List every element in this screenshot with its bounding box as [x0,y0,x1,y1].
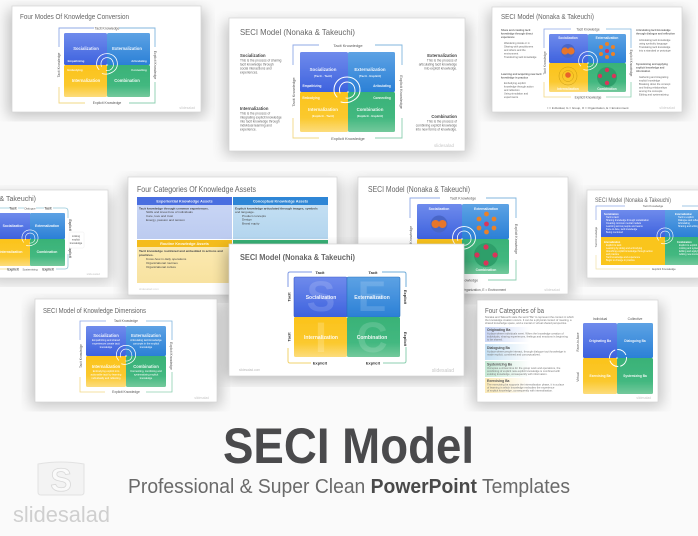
slide: SECI Model of Knowledge Dimensions: slidesalad [194,396,209,400]
slide: SECI Model of Knowledge Dimensions: Empathizing and shared [92,338,121,342]
slide: SECI Model with circles and columns: Articulating tacit knowledge [639,38,671,42]
slide: SECI Model of Knowledge Dimensions: systematizing explicit [134,372,158,376]
slide: left cropped SECI model with center box: knowledge [70,241,83,245]
slide: left cropped SECI model with center box: Internalization [0,250,22,254]
slide: SECI Model with descriptions: combining explicit knowledge [416,124,457,128]
slide: Four Categories of ba [473,300,662,406]
slide: left cropped SECI model with center box [0,190,112,282]
slide: center SECI Model with big letters: Tacit [315,270,325,275]
slide: Four Categories of ba: Originating Ba [487,328,510,332]
slide: SECI Model of Knowledge Dimensions: Internalization [92,364,121,369]
slide: right cropped SECI model with bullet lists: Creating common mental models [606,222,642,225]
slide: Four Categories Of Knowledge Assets: Explicit knowledge articulated through images, symbols [235,206,318,210]
slide: center SECI Model with big letters: Explicit [403,332,408,347]
slide: left cropped SECI model with center box: Explicit [42,268,55,272]
slide: SECI Model with circles: I = Individual, G = Group, O = Organization, E = Environment [420,288,506,292]
slide: SECI Model of Knowledge Dimensions: Articulating tacit knowledge [130,338,162,342]
slide: SECI Model with descriptions: Externalization [354,67,386,72]
slide: SECI Model with circles and columns: Tacit Knowledge [576,28,600,32]
slide: right cropped SECI model with bullet lists: Begin to change in practice [606,259,636,262]
slide: SECI Model of Knowledge Dimensions [31,299,221,406]
slide: Four Categories Of Knowledge Assets: Conceptual Knowledge Assets [253,200,308,204]
slide: SECI Model with circles: Tacit Knowledge [409,226,413,252]
slide: SECI Model with circles and columns: slidesalad [659,106,675,110]
slide: Four Modes Of Knowledge Conversion: Four Modes Of Knowledge Conversion [20,12,129,21]
slide: Four Categories Of Knowledge Assets: Organizational routines [146,261,178,265]
slide: Four Categories of ba: shared knowledge space, and a mental or virtual shared perspective. [485,321,567,325]
slide: SECI Model of Knowledge Dimensions: knowledge [140,345,153,349]
slide: SECI Model with circles and columns: Gathering and integrating [639,75,669,79]
slide: SECI Model with circles and columns: Combination [597,87,617,91]
slide: SECI Model with descriptions: Internalization [240,106,269,111]
slide: SECI Model with circles and columns: information [636,69,651,73]
slide: center SECI Model with big letters [225,244,468,380]
slide: SECI Model with circles and columns: knowledge through action [504,84,534,88]
slide: SECI Model with descriptions: Internalization [308,107,338,112]
slide: SECI Model with descriptions: (Explicit - Tacit) [312,114,334,118]
slide: SECI Model with circles: SECI Model (Nonaka & Takeuchi) [368,185,470,194]
slide: SECI Model with descriptions: slidesalad [434,143,454,148]
slide: SECI Model with circles and columns: Systemizing and applying [636,62,668,66]
slide: center SECI Model with big letters: Explicit [366,360,381,366]
slide: Four Modes Of Knowledge Conversion: Empathizing [68,59,85,63]
slide: Four Modes Of Knowledge Conversion: Socialization [73,46,99,51]
slide: Four Categories of ba: of explicit knowledge, consequently with internalization. [487,388,553,392]
slide: SECI Model with descriptions: (Tacit - Tacit) [314,74,332,78]
slide: right cropped SECI model with bullet lists: Tacit Knowledge [643,204,664,208]
slide: SECI Model of Knowledge Dimensions: Tacit Knowledge [114,319,138,323]
slide: left cropped SECI model with center box: Tacit [44,206,53,210]
slide: right cropped SECI model with bullet lists: Tacit to explicit [678,216,694,219]
slide: center SECI Model with big letters: Explicit [313,360,328,366]
slide: right cropped SECI model with bullet lists: Tacit Knowledge [594,226,598,247]
slide: SECI Model of Knowledge Dimensions: Embodying explicit into [93,369,120,373]
slide: SECI Model with descriptions: into explicit knowledge. [424,66,457,70]
slide: left cropped SECI model with center box: Linking [72,234,81,238]
slide: SECI Model with circles [354,177,572,298]
slide: SECI Model with descriptions: Combination [431,114,457,119]
slide: Four Modes Of Knowledge Conversion: Embodying [67,68,83,72]
slide: Four Categories Of Knowledge Assets: Design [242,218,252,222]
slide: Four Categories of ba: Systemizing Ba [623,374,647,378]
slide: SECI Model with circles and columns: knowledge through direct [501,32,533,36]
slide: SECI Model with circles and columns: Articulating tacit knowledge [636,28,671,32]
slide: right cropped SECI model with bullet lists: Learning across people and teams [606,225,643,228]
slide: right cropped SECI model with bullet lists: Learning by doing and embodying [606,247,643,250]
slide: right cropped SECI model with bullet lists: Explicit to explicit [679,244,698,247]
slide: Four Categories Of Knowledge Assets [124,177,341,297]
slide: SECI Model with circles and columns: Sharing with practitioners [504,44,534,48]
slide: right cropped SECI model with bullet lists: Face-to-face, tacit knowledge [606,228,638,231]
slide: SECI Model with circles and columns: Embodying explicit [504,81,526,85]
slide: Four Modes Of Knowledge Conversion: Explicit Knowledge [153,51,157,79]
slide: SECI Model with descriptions [225,18,469,155]
slide: left cropped SECI model with center box: Explicit [68,219,72,232]
slide: SECI Model with descriptions: Embodying [302,96,320,100]
slide: right cropped SECI model with bullet lists: Explicit to tacit [606,244,622,247]
slide: Four Categories of ba: made explicit, combined and conceptualized. [487,352,541,356]
slide: left cropped SECI model with center box: Combination [37,250,57,254]
slide: Four Categories Of Knowledge Assets: Brand equity [242,222,260,226]
slide: SECI Model of Knowledge Dimensions: SECI Model of Knowledge Dimensions [43,306,146,315]
slide: SECI Model of Knowledge Dimensions: Combination [133,364,159,369]
slide: center SECI Model with big letters: C [356,314,388,362]
slide: center SECI Model with big letters: S [307,273,335,321]
slide: left cropped SECI model with center box: Dialogue [24,206,36,210]
slide: Four Categories Of Knowledge Assets: slidesalad.com [139,287,159,291]
slide: Four Categories of ba: individuals, sharing experiences, feelings and emotions is beginning [487,334,568,338]
slide: SECI Model with circles and columns: experience [501,35,515,39]
slide: Four Categories of ba: Systemizing Ba [487,362,512,366]
slide: SECI Model with descriptions: This is the process of [427,58,457,62]
slide: SECI Model with circles and columns: Translating tacit knowledge [639,45,671,49]
slide: Four Categories Of Knowledge Assets: Four Categories Of Knowledge Assets [137,184,256,194]
slide: Four Categories Of Knowledge Assets: Organizational culture [146,265,176,269]
slide: SECI Model of Knowledge Dimensions: Connecting, combining and [130,369,162,373]
slide: Four Categories Of Knowledge Assets: Tacit knowledge routinized and embedded in actions and [139,249,223,253]
slide: SECI Model with circles and columns: Internalization [557,87,579,91]
slide: center SECI Model with big letters: Socialization [306,295,336,301]
slide: SECI Model of Knowledge Dimensions: knowledge [100,345,113,349]
slide: SECI Model of Knowledge Dimensions: Explicit Knowledge [112,390,140,394]
slide: SECI Model with circles and columns: explicit knowledge and [636,66,665,70]
slide: right cropped SECI model with bullet lists: Absorbing explicit knowledge through action [606,250,653,253]
slide: Four Categories of ba: Dialoguing Ba [487,346,510,350]
slide: Four Categories Of Knowledge Assets: practices. [139,253,154,257]
slide: SECI Model with circles: Tacit Knowledge [450,196,476,200]
logo: slidesalad [13,462,110,527]
slide: Four Modes Of Knowledge Conversion [8,6,205,116]
slide: left cropped SECI model with center box: Socialization [3,224,23,228]
slide: right cropped SECI model with bullet lists: Socialization [604,213,619,216]
slide: SECI Model with circles and columns: SECI Model (Nonaka & Takeuchi) [501,12,594,21]
slide: SECI Model with circles and columns: environment [504,52,519,56]
slide: SECI Model with descriptions: Socialization [310,67,337,72]
slide: left cropped SECI model with center box: Systemising [22,268,38,272]
slide: SECI Model with circles and columns: into a standard or prototype [639,48,671,52]
slide: Four Modes Of Knowledge Conversion: Explicit Knowledge [93,101,121,105]
slide: Four Categories Of Knowledge Assets: Care, love and trust [146,214,173,218]
slide: SECI Model with descriptions: Connecting [373,96,391,100]
slide: right cropped SECI model with bullet lists: Sharing knowledge through socialization [606,219,649,222]
slide: SECI Model of Knowledge Dimensions: Socialization [93,333,119,338]
slide: SECI Model with circles and columns: Tacit Knowledge [543,51,547,75]
slide: SECI Model with circles and columns: Explicit Knowledge [629,50,633,77]
slide: SECI Model with circles: Externalization [474,207,498,211]
slide: Four Modes Of Knowledge Conversion: Tacit Knowledge [95,26,119,30]
slide: SECI Model with descriptions: SECI Model (Nonaka & Takeuchi) [240,27,355,37]
slide: SECI Model with circles and columns: experiments [504,95,519,99]
slide: SECI Model with circles and columns: Explicit Knowledge [575,96,602,100]
slide: SECI Model with descriptions: (Tacit - Explicit) [359,74,381,78]
slide: SECI Model with descriptions: Tacit Knowledge [291,77,296,107]
slide: SECI Model with circles and columns: Editing and systematizing [639,92,669,96]
slide: SECI Model with descriptions: Tacit Knowledge [333,43,363,48]
slide: SECI Model of Knowledge Dimensions: Explicit Knowledge [169,342,173,370]
slide: Four Categories of ba: Exercising Ba [487,379,510,383]
slide: SECI Model with descriptions: Externalization [427,53,457,58]
slide: Four Modes Of Knowledge Conversion: Connecting [131,68,147,72]
slide: Four Categories of ba: Face-to-face [576,332,580,352]
slide: SECI Model with circles and columns: Socialization [558,36,578,40]
slide: left cropped SECI model with center box: Tacit [9,206,18,210]
slide: SECI Model with descriptions: individual learning and [240,124,272,128]
slide: center SECI Model with big letters: Internalization [304,335,338,341]
slide: Four Categories of ba: to be shared. [487,338,503,342]
slide: Four Categories Of Knowledge Assets: Skills and know-how of individuals [146,210,193,214]
slide: SECI Model with circles and columns: Externalization [596,36,618,40]
slide: right cropped SECI model with bullet lists: Externalization [675,213,693,216]
slide: SECI Model with circles and columns: and others and the [504,48,526,52]
slide: Four Categories of ba: A place where individuals meet. When the knowledge creation of [487,332,564,336]
slide: SECI Model of Knowledge Dimensions: experiences create tacit [92,342,120,346]
slide: center SECI Model with big letters: Externalization [354,295,390,301]
slide: Four Modes Of Knowledge Conversion: Internalization [72,78,101,83]
slide: right cropped SECI model with bullet lists: Being mentored [606,231,624,234]
slide: right cropped SECI model with bullet lists: Combination [677,241,692,244]
slide: SECI Model with circles: Explicit Knowledge [514,224,518,254]
subtitle: Professional & Super Clean PowerPoint Templates [128,476,570,498]
slide: Four Categories of ba: the knowledge creation occurs. It can be a physical context of meeting, a [485,318,572,322]
slide: left cropped SECI model with center box: Explicit [7,268,20,272]
slide: left cropped SECI model with center box: explicit [72,238,80,242]
slide: SECI Model with circles: Explicit Knowledge [448,278,478,282]
slide: center SECI Model with big letters: E [358,273,386,321]
slide: right cropped SECI model with bullet lists: SECI Model (Nonaka & Takeuchi) [595,197,671,204]
slide: Four Categories Of Knowledge Assets: Tacit knowledge through common experiences. [139,206,209,210]
slide: right cropped SECI model with bullet lists: Tacit to tacit [606,216,619,219]
slide: Four Modes Of Knowledge Conversion: Tacit Knowledge [57,53,61,77]
slide: SECI Model of Knowledge Dimensions: concepts in the explicit [133,342,159,346]
slide: SECI Model with circles and columns: Wandering inside or in [504,41,530,45]
slide: SECI Model of Knowledge Dimensions: individually and reflecting [92,376,121,380]
slide: SECI Model with descriptions: Explicit Knowledge [399,75,404,110]
slide: SECI Model with descriptions: tacit knowledge through [240,62,274,66]
slide: Four Categories of ba: The exercising ba supports the internalization phase, it is a place [487,382,565,386]
slide: SECI Model with descriptions: into tacit knowledge through [240,120,280,124]
slide: Four Categories of ba: combining of explicit new explicit knowledge is combined with [487,369,561,373]
slide: SECI Model with descriptions: experiences. [240,70,258,74]
slide: Four Categories Of Knowledge Assets: Know-how in daily operations [146,257,187,261]
slide: SECI Model with circles and columns: and reflection [504,88,520,92]
slide: Four Categories of ba: Individual [593,317,607,321]
slide: Four Categories of ba: Collective [628,317,642,321]
slide: SECI Model with descriptions: integrating explicit knowledge [240,116,282,120]
logo: slidesalad: slidesalad [13,502,110,527]
slide: SECI Model with descriptions: articulating tacit knowledge [419,62,457,66]
slide: SECI Model with circles and columns: through dialogue and reflection [636,32,675,36]
slide: Four Categories Of Knowledge Assets: Experiential Knowledge Assets [156,200,213,204]
slide: Four Categories Of Knowledge Assets: Routine Knowledge Assets [160,242,209,246]
slide: right cropped SECI model with bullet lists: Sharing and writing [678,225,698,228]
slide: center SECI Model with big letters: Tacit [286,292,292,302]
slide: center SECI Model with big letters: Combination [357,335,387,341]
slide: center SECI Model with big letters: I [315,314,327,362]
slide: Four Modes Of Knowledge Conversion: Articulating [131,59,147,63]
slide: SECI Model with descriptions: This is the process of [240,112,270,116]
slide: Four Categories of ba: Nonaka and Takeuchi state the word "Ba" to represent the context in which [485,315,574,319]
slide: Four Categories of ba: slidesalad [636,396,651,400]
slide: SECI Model with circles and columns: I = Individual, G = Group, O = Organization, E = Environment [547,106,629,110]
slide: SECI Model with descriptions: social interactions and [240,66,272,70]
slide: center SECI Model with big letters: SECI Model (Nonaka & Takeuchi) [240,252,355,262]
slide: Four Categories of ba: Virtual [576,372,580,382]
slide: SECI Model with circles and columns: Learning and acquiring new tacit [501,72,542,76]
slide: SECI Model with circles and columns: Share and creating tacit [501,28,531,32]
slide: Four Categories of ba: Dialoguing Ba [624,339,646,343]
slide: SECI Model with descriptions: into new forms of knowledge. [416,128,457,132]
slide: SECI Model with descriptions: (Explicit - Explicit) [357,114,383,118]
slide: SECI Model with circles and columns: Breaking down the concept [639,82,671,86]
slide: right cropped SECI model with bullet lists: Tacit knowledge and experience [606,256,641,259]
slide: Four Modes Of Knowledge Conversion: Externalization [112,46,142,51]
slide: Four Categories Of Knowledge Assets: Product concepts [242,214,266,218]
slide: SECI Model with descriptions: Explicit Knowledge [331,136,366,141]
slide: SECI Model with circles and columns [488,7,686,116]
slide: Four Categories of ba: existing knowledge, consequently with information. [487,372,548,376]
title: SECI Model [223,418,474,474]
slide: Four Categories of ba: Four Categories of ba [485,306,545,315]
slide: Four Modes Of Knowledge Conversion: Combination [114,78,140,83]
slide: Four Categories Of Knowledge Assets: Energy, passion and tension [146,218,185,222]
slide: SECI Model with descriptions: This is the process of [427,120,457,124]
slide: Four Categories of ba: Exercising Ba [589,374,611,378]
logo: slidesalad: S [50,462,72,498]
slide: right cropped SECI model with bullet lists: Articulating [678,222,690,225]
slide: SECI Model with circles: slidesalad [544,288,560,292]
slide: SECI Model with descriptions: experience. [240,128,257,132]
slide: left cropped SECI model with center box: slidesalad [87,272,100,276]
slide: SECI Model with descriptions: Empathizing [303,84,322,88]
slide: left cropped SECI model with center box: Externalization [35,224,59,228]
slide: SECI Model of Knowledge Dimensions: actionable tacit by learning [91,372,122,376]
slide: right cropped SECI model with bullet lists: Explicit Knowledge [652,267,676,271]
slide: center SECI Model with big letters: Tacit [368,270,378,275]
slide: SECI Model with circles and columns: Transferring tacit knowledge [504,55,537,59]
slide: center SECI Model with big letters: slidesalad.com [239,368,260,372]
slide: left cropped SECI model with center box: Explicit [68,246,72,259]
slide: SECI Model with circles and columns: among the concepts [639,89,663,93]
slide: Four Categories of ba: Occupies a virtual time for the group work and operations, the [487,366,561,370]
slide: SECI Model with descriptions: This is the process of sharing [240,58,282,62]
slide: SECI Model with circles and columns: and finding relationships [639,86,668,90]
slide: right cropped SECI model with bullet lists: and practice [606,253,620,256]
slide: right cropped SECI model with bullet lists [583,190,698,282]
slide: Four Categories of ba: Originating Ba [589,339,611,343]
slide: SECI Model with circles and columns: using symbolic language [639,42,668,46]
slide: SECI Model with descriptions: Socialization [240,53,266,58]
slide: Four Categories Of Knowledge Assets: and language. [235,210,255,214]
slide: center SECI Model with big letters: Tacit [286,332,292,342]
slide: center SECI Model with big letters: Explicit [403,290,408,305]
slide: SECI Model of Knowledge Dimensions: Tacit Knowledge [79,344,83,368]
slide: SECI Model with circles: Combination [476,268,496,272]
slide: SECI Model with circles: Socialization [429,207,449,211]
slide: Four Categories of ba: A place where people interact, through dialogue tacit knowledge is [487,350,566,354]
slide: SECI Model of Knowledge Dimensions: Externalization [131,333,161,338]
slide: SECI Model of Knowledge Dimensions: knowledge [140,376,153,380]
slide: SECI Model with circles and columns: explicit knowledge [639,78,661,82]
slide: Four Modes Of Knowledge Conversion: slidesalad [179,106,195,110]
slide: SECI Model with descriptions: Articulating [373,84,391,88]
slide: SECI Model with circles and columns: Using simulation and [504,92,529,96]
slide: right cropped SECI model with bullet lists: Internalization [604,241,621,244]
slide: Four Categories of ba: of learning in which knowledge embodies the experience [487,386,555,390]
slide: center SECI Model with big letters: slidesalad [432,368,454,374]
slide: SECI Model with circles and columns: knowledge in practice [501,76,529,80]
slide: SECI Model with descriptions: Combination [357,107,384,112]
